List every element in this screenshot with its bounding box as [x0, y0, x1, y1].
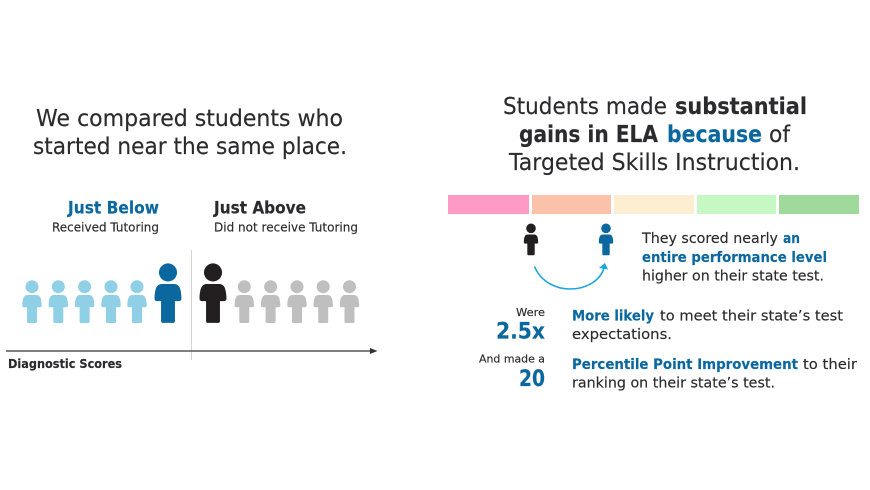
text: performance level: an	[783, 231, 800, 247]
icons: students just below	[22, 280, 147, 323]
panel: ELA gains	[448, 94, 859, 392]
stat: 2.5x	[496, 306, 545, 344]
text: performance level	[641, 231, 827, 284]
icon: student after	[599, 224, 613, 255]
heading: substantial gains: Students made	[503, 94, 667, 120]
arrow: diagnostic score axis	[6, 348, 378, 354]
text: percentile improvement	[572, 357, 857, 392]
text: more likely: expectations.	[572, 327, 672, 343]
text: percentile improvement: to their	[803, 357, 857, 373]
icons: students just above	[235, 280, 359, 323]
heading: substantial gains: gains in ELA	[519, 122, 658, 148]
label: just below: Just Below	[67, 198, 159, 218]
panel: comparison of students	[6, 106, 378, 371]
icon: highlighted student above	[200, 263, 226, 323]
heading: we compared students: We compared students who	[36, 106, 343, 132]
stat: 20	[479, 353, 545, 392]
heading: substantial gains: because	[667, 122, 762, 148]
label: just above: Just Above	[213, 198, 306, 218]
label: just above	[213, 198, 358, 235]
stat: 2.5x: 2.5x	[496, 318, 545, 344]
text: performance level: They scored nearly	[641, 231, 778, 247]
label: just above: Did not receive Tutoring	[214, 220, 358, 235]
text: more likely	[572, 308, 843, 343]
icon: highlighted student below	[155, 263, 181, 323]
label: just below: Received Tutoring	[52, 220, 159, 235]
heading: substantial gains: substantial	[675, 94, 807, 120]
heading: substantial gains: of	[769, 122, 791, 148]
stat: 20: 20	[519, 366, 545, 392]
text: percentile improvement: ranking on their state’s test.	[572, 376, 775, 392]
text: percentile improvement: Percentile Point Improvement	[572, 357, 798, 373]
stat: 20: And made a	[479, 353, 545, 366]
heading: we compared students: started near the same place.	[33, 134, 347, 160]
stat: 2.5x: Were	[516, 306, 545, 319]
heading: we compared students	[33, 106, 347, 160]
text: more likely: More likely	[572, 308, 654, 324]
heading: substantial gains	[503, 94, 807, 176]
arrow: improvement	[534, 263, 608, 289]
heading: substantial gains: Targeted Skills Instruction.	[508, 150, 800, 176]
label: just below	[52, 198, 159, 235]
text: performance level: entire performance level	[642, 250, 827, 266]
icon: student before	[524, 224, 538, 255]
text: performance level: higher on their state test.	[642, 268, 824, 284]
axis label: Diagnostic Scores	[8, 356, 122, 371]
text: more likely: to meet their state’s test	[660, 308, 843, 324]
performance level bar	[448, 195, 859, 214]
